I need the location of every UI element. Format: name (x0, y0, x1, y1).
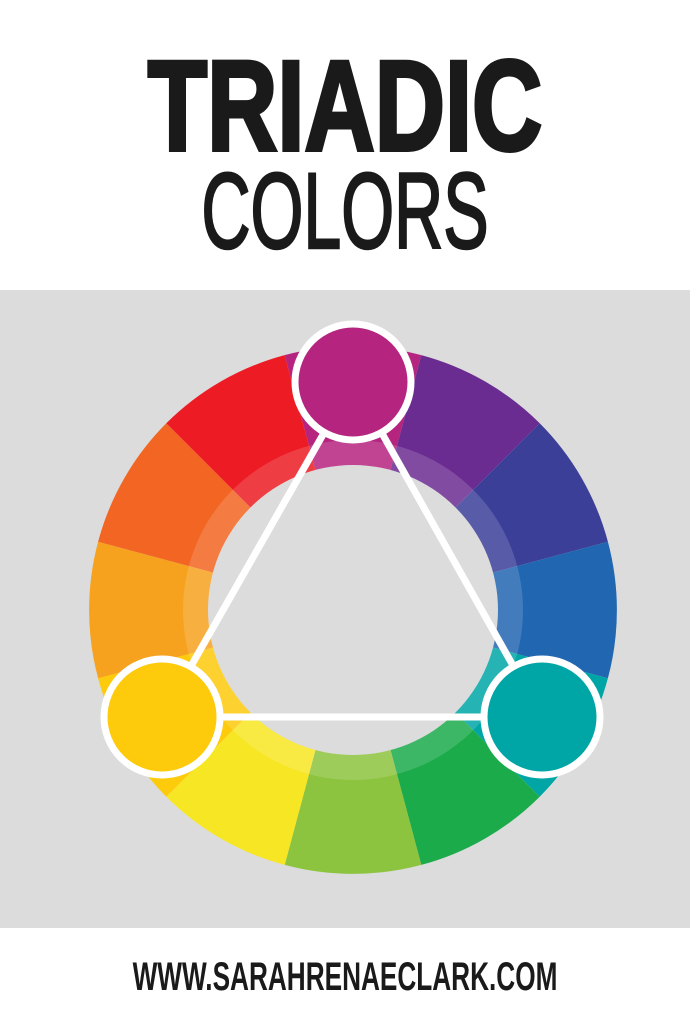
color wheel (89, 346, 617, 874)
gray panel background (0, 290, 690, 928)
title: TRIADIC: TRIADIC (148, 35, 542, 178)
footer url: WWW.SARAHRENAECLARK.COM (133, 955, 557, 999)
swatch: teal (484, 659, 600, 775)
triangle connecting triad (162, 382, 542, 717)
swatch: magenta (295, 324, 411, 440)
swatch: yellow (104, 659, 220, 775)
subtitle: COLORS: COLORS (201, 151, 489, 272)
